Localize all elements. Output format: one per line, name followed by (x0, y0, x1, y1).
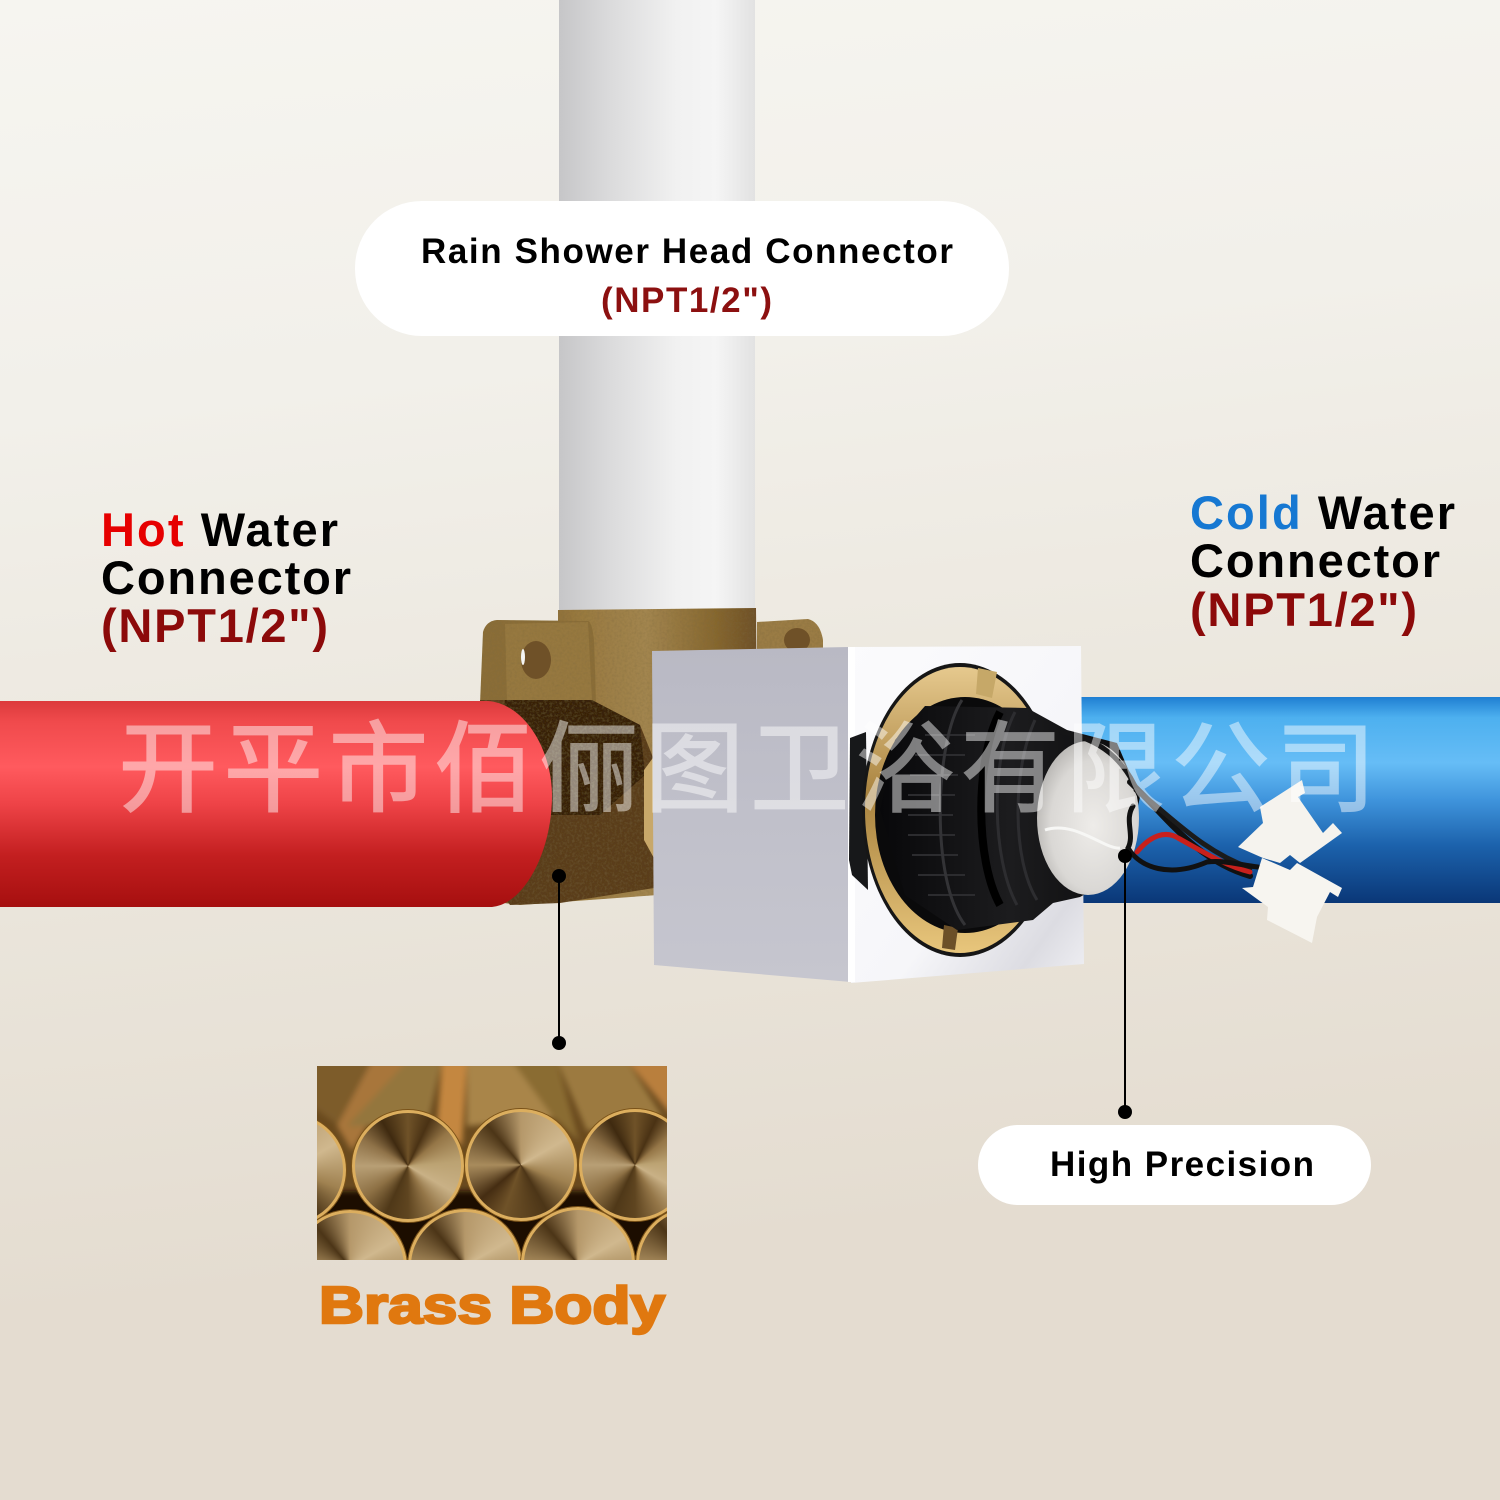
brass ring (862, 663, 1058, 957)
high precision callout (978, 1125, 1371, 1205)
top connector callout (355, 201, 1009, 336)
connector label: Rain Shower Head Connector (421, 232, 953, 271)
blue cold water pipe (1078, 697, 1500, 903)
hot water label: Connector (101, 551, 351, 604)
vertical white pipe (559, 0, 755, 612)
hot water label: (NPT1/2") (101, 599, 328, 652)
red hot water pipe (0, 701, 552, 907)
white wire connector upper (1238, 780, 1342, 863)
cold water label (1190, 486, 1455, 636)
watermark: 开平市佰俪图卫浴有限公司 (118, 688, 1376, 833)
white wire connector lower (1242, 858, 1342, 943)
white sealed cap (1037, 741, 1139, 895)
brass rod ends (317, 1108, 667, 1260)
brass valve body (480, 608, 823, 905)
connector size: (NPT1/2") (601, 281, 772, 320)
sensor wires (1128, 782, 1258, 876)
sensor body (880, 700, 1140, 930)
high precision callout: High Precision (1050, 1145, 1314, 1184)
brass pointer line (552, 869, 566, 1050)
precision pointer line (1118, 849, 1132, 1119)
pill background (355, 201, 1009, 336)
brass body label: Brass Body (319, 1277, 665, 1335)
chrome valve housing (652, 646, 1084, 983)
rear black gasket (849, 732, 868, 890)
cold water label: (NPT1/2") (1190, 583, 1417, 636)
housing front face (652, 647, 851, 982)
cold water label: Connector (1190, 534, 1440, 587)
hot water label (101, 503, 351, 652)
brass rods photo (317, 1066, 667, 1260)
black threaded cylinder (880, 706, 1140, 930)
housing side face (848, 646, 1084, 983)
cold water label: Cold Water (1190, 486, 1455, 539)
hot water label: Hot Water (101, 503, 338, 556)
